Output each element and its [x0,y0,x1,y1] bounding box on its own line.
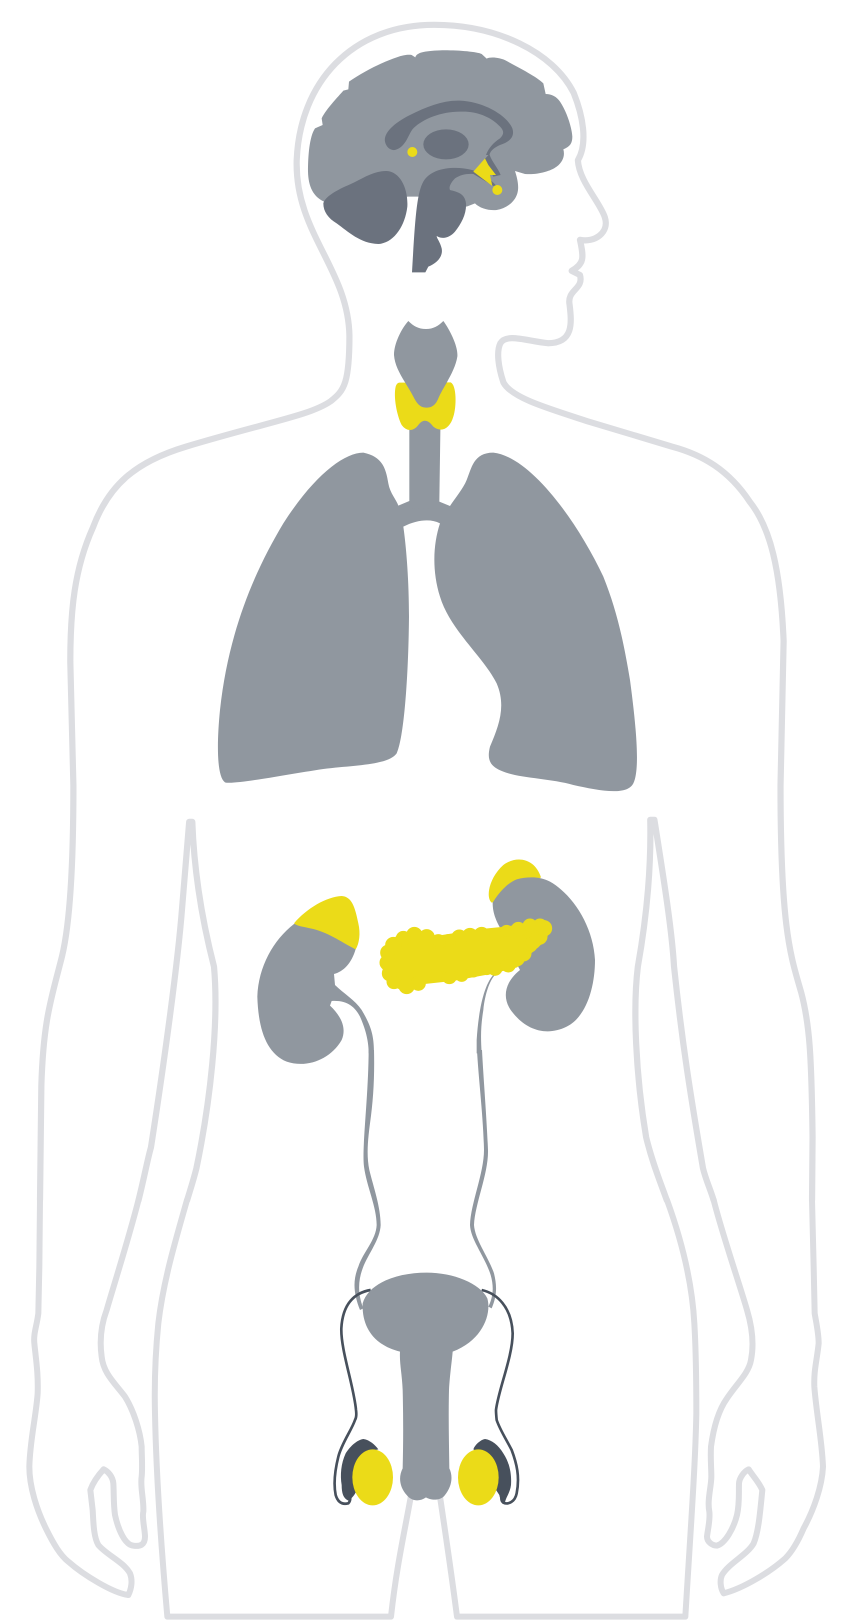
corpus callosum [385,101,513,155]
bladder and penis [363,1273,488,1500]
right testis [458,1449,499,1505]
right epididymis [473,1439,511,1503]
abdominal organs [257,859,595,1064]
pancreas [380,919,551,993]
thalamus [423,129,469,159]
right ureter upper [477,973,495,1053]
left testis [352,1449,393,1505]
pineal gland dot [407,147,417,157]
thyroid [395,382,456,430]
right adrenal gland [489,859,541,903]
left kidney [257,920,374,1064]
brain [308,50,572,272]
hypothalamus gland dot [492,185,502,195]
right kidney [493,877,595,1031]
lungs [218,453,637,791]
cerebellum [323,171,407,244]
brain stem [412,168,496,272]
right ureter [470,1050,496,1308]
trachea [398,410,450,513]
left vas deferens [335,1290,371,1504]
larynx [394,321,457,408]
cerebrum [308,50,572,210]
left epididymis [341,1439,378,1501]
ureters [355,1050,496,1310]
pituitary gland [473,158,496,186]
pituitary stalk [484,154,501,177]
right vas deferens [482,1290,518,1503]
reproductive organs [335,1273,518,1505]
neck and chest organs [218,321,637,791]
left adrenal gland [294,896,359,949]
left ureter [355,1050,381,1310]
